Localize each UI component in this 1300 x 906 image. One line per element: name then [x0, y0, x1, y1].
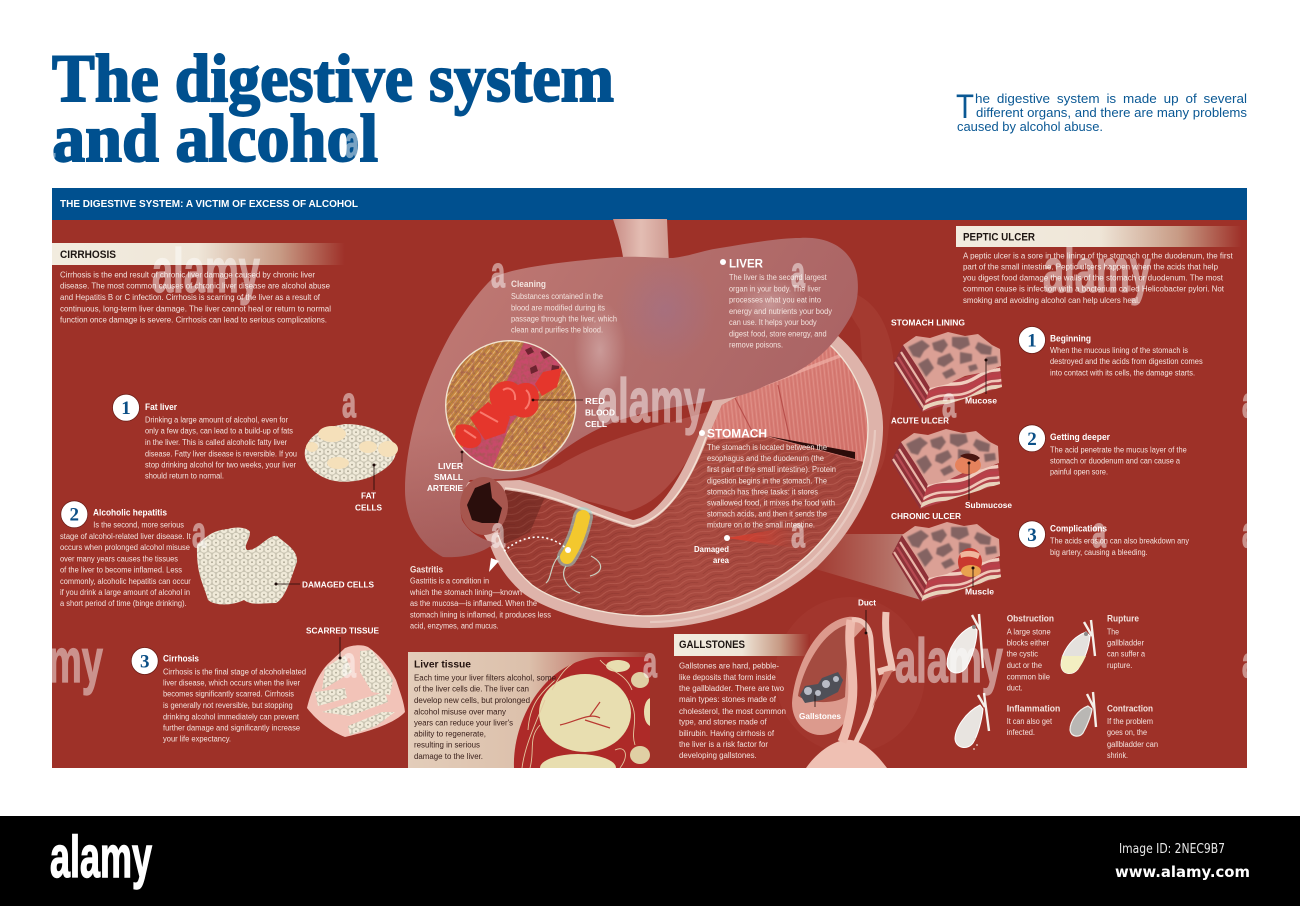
title: The digestive system — [52, 40, 614, 116]
text: obstruction: the cystic — [1007, 650, 1038, 659]
text: cleaning: passage through the liver, which — [511, 315, 617, 324]
ulcer diagram: acute ulcer — [891, 416, 1012, 510]
panel: cirrhosis intro: Cirrhosis is the end result of chronic liver damage caused by chronic liver — [60, 271, 315, 280]
icon: fat liver cells — [305, 424, 398, 490]
step 3: cirrhosis: 3 — [140, 652, 149, 672]
panel: liver tissue: damage to the liver. — [414, 752, 483, 761]
step 1: fat liver: only a few days, can lead to a build-up of fats — [145, 427, 293, 436]
ulcer diagram: chronic ulcer: Muscle — [965, 586, 994, 596]
panel: liver tissue: of the liver cells die. The liver can — [414, 685, 529, 694]
stomach wall — [462, 335, 883, 628]
gallbladder illustration — [792, 598, 893, 768]
stomach interior — [498, 346, 868, 616]
step 2: getting deeper: The acid penetrate the mucus layer of the — [1050, 445, 1187, 454]
text: rupture: The — [1107, 627, 1119, 636]
ulcer diagram: stomach lining: STOMACH LINING — [891, 318, 965, 328]
text: rupture: Rupture — [1107, 614, 1139, 624]
icon: gallbladder rupture — [1061, 620, 1095, 674]
gallstones — [800, 672, 843, 703]
step 3: cirrhosis: becomes significantly scarred. Cirrhosis — [163, 690, 294, 699]
step 3: cirrhosis — [131, 648, 306, 744]
text: cleaning — [511, 279, 617, 335]
text: contraction: shrink. — [1107, 751, 1128, 760]
text: inflammation: infected. — [1007, 728, 1035, 737]
panel: liver tissue: alcohol misuse over many — [414, 707, 506, 716]
text: obstruction: blocks either — [1007, 639, 1049, 648]
panel: liver tissue: resulting in serious — [414, 741, 480, 750]
label: scarred tissue: SCARRED TISSUE — [306, 626, 379, 636]
liver small arterie label: LIVER — [438, 461, 464, 471]
label: fat cells: CELLS — [355, 502, 382, 512]
text: obstruction: duct. — [1007, 683, 1023, 692]
header bar: THE DIGESTIVE SYSTEM: A VICTIM OF EXCESS OF ALCOHOL — [60, 199, 358, 210]
watermarks: a — [491, 508, 505, 557]
step 2: alcoholic hepatitis: occurs when prolonged alcohol misuse — [60, 543, 191, 552]
text: liver: The liver is the second largest — [729, 273, 827, 282]
text: cleaning: clean and purifies the blood. — [511, 326, 603, 335]
panel: cirrhosis intro: and Hepatitis B or C infection. Cirrhosis is scarring of the liver as a result of — [60, 293, 321, 302]
step 1: fat liver: in the liver. This is called alcoholic fatty liver — [145, 438, 287, 447]
watermarks: a — [192, 508, 206, 557]
text: liver: digest food, store energy, and — [729, 329, 827, 338]
text: inflammation — [1007, 703, 1060, 737]
text: liver: LIVER — [729, 256, 763, 270]
panel: liver tissue — [408, 652, 650, 768]
step 3: cirrhosis: Cirrhosis is the final stage of alcoholrelated — [163, 667, 306, 676]
text: stomach: swallowed food, it mixes the food with — [707, 499, 835, 508]
step 1: beginning — [1018, 326, 1203, 378]
magnified blood cells circle — [445, 340, 576, 472]
step 2: alcoholic hepatitis: 2 — [70, 504, 79, 526]
step 1: beginning: 1 — [1027, 330, 1037, 352]
step 2: alcoholic hepatitis: stage of alcohol-related liver disease. It — [60, 532, 191, 541]
text: stomach: digestion begins in the stomach. The — [707, 476, 828, 485]
watermarks: alamy — [1043, 237, 1151, 306]
text: stomach: first part of the small intestine). Protein — [707, 465, 836, 474]
intro paragraph: he digestive system is made up of several — [975, 91, 1247, 106]
watermarks: a — [791, 508, 805, 557]
step 1: beginning: Beginning — [1050, 334, 1091, 344]
panel: gallstones text: cholesterol, the most common — [679, 707, 786, 716]
watermarks: a — [643, 638, 657, 687]
step 2: alcoholic hepatitis: Is the second, more serious — [93, 521, 184, 530]
step 1: fat liver — [112, 394, 297, 481]
panel: peptic ulcer text: part of the small intestine. Peptic ulcers happen when the acids that help — [963, 262, 1219, 271]
liver small arterie label — [427, 451, 464, 493]
footer bar — [0, 816, 1300, 906]
damaged area marker — [724, 526, 795, 548]
step 1: fat liver: 1 — [121, 398, 131, 419]
red main panel — [52, 220, 1247, 768]
bacterium with dotted arrow — [489, 517, 601, 593]
icon: scarred tissue — [307, 637, 405, 737]
watermarks: alamy — [152, 237, 260, 306]
text: gastritis: which the stomach lining—known — [409, 588, 522, 597]
panel: liver tissue: ability to regenerate, — [414, 729, 486, 738]
step 2: alcoholic hepatitis: a short period of time (binge drinking). — [60, 599, 187, 608]
step 3: complications — [1018, 521, 1189, 557]
step 1: fat liver: Drinking a large amount of alcohol, even for — [145, 415, 288, 424]
text: inflammation: Inflammation — [1007, 703, 1060, 713]
panel: peptic ulcer text — [956, 226, 1242, 305]
step 2: alcoholic hepatitis — [60, 501, 191, 608]
watermarks: a — [1242, 378, 1256, 427]
step 3: cirrhosis: your life expectancy. — [163, 735, 231, 744]
liver small arterie label: ARTERIE — [427, 483, 463, 493]
intro paragraph — [956, 88, 1248, 134]
text: rupture — [1107, 614, 1146, 670]
text: obstruction: duct or the — [1007, 661, 1043, 670]
panel: peptic ulcer text: you digest food damage the walls of the stomach or duodenum. The most — [963, 274, 1224, 283]
panel: liver tissue: years can reduce your liver's — [414, 718, 513, 727]
liver illustration — [405, 238, 858, 557]
pylorus opening — [460, 477, 508, 535]
watermarks: a — [37, 378, 51, 427]
liver small arterie label: SMALL — [434, 472, 463, 482]
text: stomach: stomach has three tasks: it stores — [707, 487, 818, 496]
text: liver: processes what you eat into — [729, 296, 822, 305]
panel: gallstones text: bilirubin. Having cirrhosis of — [679, 729, 775, 738]
text: gastritis: acid, enzymes, and mucus. — [410, 622, 499, 631]
text: rupture: gallbladder — [1107, 639, 1144, 648]
red blood cell label — [532, 396, 615, 429]
ulcer diagram: stomach lining: Mucose — [965, 396, 997, 406]
footer bar: alamy — [50, 825, 152, 890]
watermarks: a — [342, 378, 356, 427]
panel: peptic ulcer text: A peptic ulcer is a sore in the lining of the stomach or the duodenum, the first — [963, 251, 1233, 260]
text: stomach: esophagus and the duodenum (the — [707, 454, 825, 463]
panel: peptic ulcer text: common cause is infection with a bacterium called Helicobacter pylori. Not — [963, 285, 1225, 294]
esophagus — [613, 219, 669, 265]
red blood cell label: RED — [585, 396, 605, 406]
text: contraction: If the problem — [1107, 717, 1153, 726]
text: cleaning: Substances contained in the — [511, 292, 604, 301]
label: damaged cells: DAMAGED CELLS — [302, 580, 374, 590]
panel: gallstones text: type, and stones made of — [679, 718, 767, 727]
step 2: getting deeper: stomach or duodenum and can cause a — [1050, 456, 1180, 465]
panel: gallstones text: the gallbladder. There are two — [679, 684, 785, 693]
watermarks: a — [1242, 638, 1256, 687]
panel: cirrhosis intro: disease. The most common causes of chronic liver disease are alcohol abuse — [60, 282, 331, 291]
icon: damaged cells — [197, 528, 300, 604]
watermarks: alamy — [895, 627, 1003, 696]
text: obstruction — [1007, 614, 1054, 692]
step 3: cirrhosis: liver disease, which occurs when the liver — [163, 679, 300, 688]
step 1: fat liver: should return to normal. — [145, 472, 224, 481]
text: cleaning: blood are modified during its — [511, 303, 605, 312]
faint background organ shapes — [490, 290, 925, 753]
stomach illustration — [462, 330, 890, 630]
panel: gallstones text: the liver is a risk factor for — [679, 740, 768, 749]
text: contraction: gallbladder can — [1107, 740, 1158, 749]
panel: peptic ulcer text: smoking and avoiding alcohol can help ulcers heal. — [963, 296, 1140, 305]
watermarks: a — [791, 248, 805, 297]
step 1: beginning: destroyed and the acids from digestion comes — [1050, 357, 1203, 366]
step 3: cirrhosis: further damage and significantly increase — [163, 724, 301, 733]
title — [52, 40, 614, 176]
step 3: complications: big artery, causing a bleeding. — [1050, 548, 1148, 557]
panel: cirrhosis intro: continuous, long-term liver damage. The liver cannot heal or return to normal — [60, 304, 331, 313]
red blood cell label: BLOOD — [585, 408, 615, 418]
step 2: getting deeper — [1018, 425, 1187, 477]
ulcer diagram: chronic ulcer — [891, 511, 1003, 602]
watermarks: a — [1092, 508, 1106, 557]
text: liver: can use. It helps your body — [729, 318, 817, 327]
step 2: getting deeper: 2 — [1027, 429, 1037, 450]
text: liver: remove poisons. — [729, 340, 783, 349]
text: gastritis: Gastritis — [410, 564, 443, 574]
step 2: alcoholic hepatitis: if you drink a large amount of alcohol in — [60, 588, 190, 597]
panel: cirrhosis intro: CIRRHOSIS — [60, 249, 116, 261]
duodenum — [806, 740, 887, 768]
text: cleaning: Cleaning — [511, 279, 546, 289]
panel: liver tissue: develop new cells, but prolonged — [414, 696, 530, 705]
liver tissue micrograph — [514, 657, 650, 768]
ulcer diagram: stomach lining — [891, 318, 1004, 412]
text: contraction — [1107, 703, 1158, 760]
panel: cirrhosis intro — [52, 243, 345, 324]
gallbladder illustration: Duct — [858, 598, 876, 608]
text: gastritis: Gastritis is a condition in — [410, 577, 489, 586]
text: gastritis: stomach lining is inflamed, it produces less — [410, 610, 551, 619]
title: and alcohol — [52, 100, 378, 176]
panel: gallstones text: like deposits that form inside — [679, 673, 776, 682]
watermarks: a — [491, 248, 505, 297]
text: liver — [720, 256, 832, 349]
watermarks: a — [942, 378, 956, 427]
text: inflammation: It can also get — [1007, 717, 1053, 726]
step 3: complications: Complications — [1050, 524, 1107, 534]
step 2: alcoholic hepatitis: commonly, alcoholic hepatitis can occur — [60, 577, 191, 586]
watermarks: a — [345, 118, 359, 167]
panel: peptic ulcer text: PEPTIC ULCER — [963, 232, 1035, 244]
text: stomach: STOMACH — [707, 426, 767, 440]
text: rupture: can suffer a — [1107, 650, 1146, 659]
ulcer diagram: acute ulcer: ACUTE ULCER — [891, 416, 950, 426]
gallbladder duct — [842, 620, 853, 742]
label: damaged area: Damaged — [694, 544, 729, 554]
step 1: fat liver: Fat liver — [145, 402, 177, 412]
panel: liver tissue: Each time your liver filters alcohol, some — [414, 674, 557, 683]
panel: cirrhosis intro: function once damage is severe. Cirrhosis can lead to serious complications. — [60, 316, 327, 324]
text: contraction: Contraction — [1107, 703, 1153, 713]
panel: gallstones text: Gallstones are hard, pebble- — [679, 662, 779, 671]
step 3: complications: 3 — [1027, 525, 1037, 546]
label: damaged area — [694, 544, 729, 565]
step 1: fat liver: disease. Fatty liver disease is reversible. If you — [145, 449, 297, 458]
header bar — [52, 188, 1247, 220]
step 3: cirrhosis: drinking alcohol immediately can prevent — [163, 712, 300, 721]
text: liver: energy and nutrients your body — [729, 307, 832, 316]
panel: gallstones text: developing gallstones. — [679, 751, 757, 760]
watermarks: a — [342, 638, 356, 687]
panel: gallstones text — [674, 634, 810, 760]
text: liver: organ in your body. The liver — [729, 284, 821, 293]
watermarks: a — [41, 118, 55, 167]
icon: gallbladder inflammation — [955, 693, 989, 750]
watermarks — [0, 118, 1256, 696]
text: stomach — [699, 426, 836, 530]
step 3: cirrhosis: Cirrhosis — [163, 654, 199, 664]
watermarks: alamy — [0, 627, 103, 696]
ulcer diagram: acute ulcer: Submucose — [965, 500, 1012, 510]
text: stomach: mixture on to the small intestine. — [707, 521, 815, 530]
gallbladder sac — [792, 617, 866, 735]
text: gastritis: as the mucosa—is inflamed. When the — [410, 599, 538, 608]
watermarks: alamy — [597, 367, 705, 436]
footer bar: Image ID: 2NEC9B7 — [1119, 842, 1225, 857]
step 2: alcoholic hepatitis: over many years causes the tissues — [60, 554, 178, 563]
step 1: fat liver: stop drinking alcohol for two weeks, your liver — [145, 460, 296, 469]
intro paragraph: different organs, and there are many problems — [976, 105, 1248, 120]
footer bar: www.alamy.com — [1115, 863, 1250, 881]
text: gastritis — [409, 564, 551, 631]
text: contraction: goes on, the — [1107, 728, 1147, 737]
step 3: cirrhosis: is generally not reversible, but stopping — [163, 701, 293, 710]
panel: liver tissue: Liver tissue — [414, 658, 471, 670]
text: obstruction: Obstruction — [1007, 614, 1054, 624]
text: obstruction: common bile — [1007, 672, 1051, 681]
red blood cell label: CELL — [585, 419, 607, 429]
label: fat cells — [355, 490, 382, 512]
panel: gallstones text: GALLSTONES — [679, 639, 745, 651]
watermarks: a — [1242, 508, 1256, 557]
step 2: alcoholic hepatitis: of the liver to become inflamed. Less — [60, 566, 182, 575]
text: rupture: rupture. — [1107, 661, 1132, 670]
step 3: complications: The acids erosion can also breakdown any — [1050, 537, 1189, 546]
ulcer diagram: chronic ulcer: CHRONIC ULCER — [891, 511, 962, 521]
text: stomach: The stomach is located between the — [707, 443, 828, 452]
panel: gallstones text: main types: stones made of — [679, 695, 777, 704]
step 1: beginning: into contact with its cells, the damage starts. — [1050, 369, 1195, 378]
gallbladder illustration: Gallstones — [799, 711, 841, 721]
step 2: getting deeper: painful open sore. — [1050, 468, 1108, 477]
text: stomach: stomach acids, and then it sends the — [707, 510, 828, 519]
label: fat cells: FAT — [361, 490, 377, 500]
step 1: beginning: When the mucous lining of the stomach is — [1050, 346, 1188, 355]
intro paragraph: caused by alcohol abuse. — [957, 119, 1103, 134]
step 2: getting deeper: Getting deeper — [1050, 432, 1110, 442]
text: obstruction: A large stone — [1007, 627, 1051, 636]
intro paragraph: T — [956, 88, 974, 126]
icon: gallbladder obstruction — [947, 614, 983, 673]
step 2: alcoholic hepatitis: Alcoholic hepatitis — [93, 508, 167, 518]
icon: gallbladder contraction — [1070, 692, 1096, 736]
label: damaged area: area — [713, 555, 729, 565]
zoom cone to chronic ulcer — [812, 534, 921, 600]
